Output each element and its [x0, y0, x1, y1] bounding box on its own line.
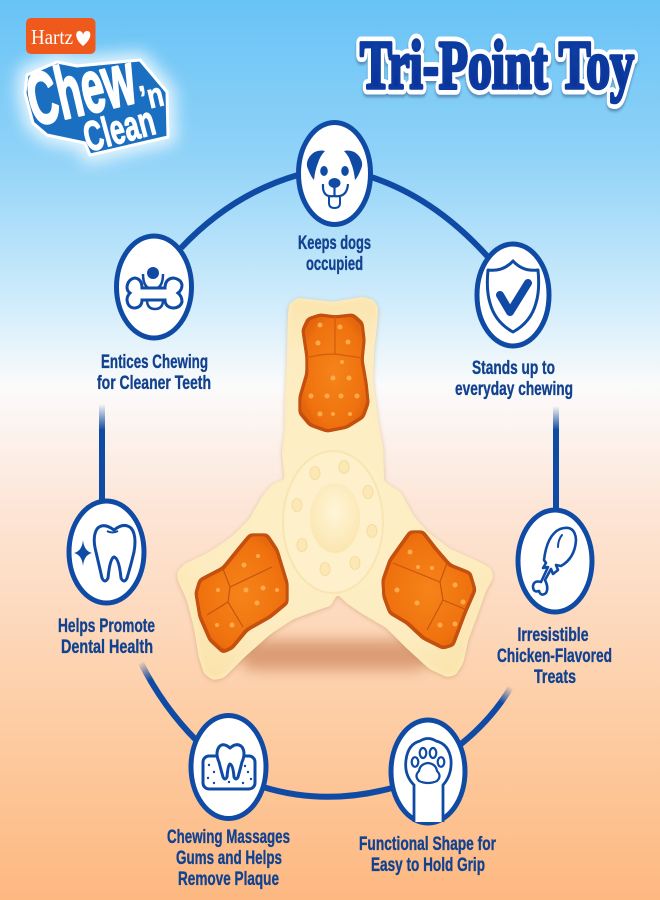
label: keeps dogs occupied: occupied [306, 254, 363, 275]
label: functional shape: Functional Shape for [359, 834, 496, 855]
logo glow [25, 60, 168, 155]
top orange insert [300, 315, 368, 431]
label: entices chewing: for Cleaner Teeth [97, 373, 211, 394]
disc studs [292, 460, 377, 576]
label: chewing massages gums: Gums and Helps [176, 848, 282, 869]
product: tri-point chew toy [178, 298, 492, 679]
icon: tooth with sparkle [69, 501, 144, 603]
central bump [310, 483, 360, 553]
central disc [283, 451, 383, 593]
icon: dog face [298, 122, 370, 224]
toy body [178, 298, 492, 679]
label: entices chewing: Entices Chewing [101, 352, 208, 373]
Chew'n wordmark [19, 36, 168, 161]
label: chewing massages gums: Chewing Massages [167, 827, 290, 848]
Hartz badge [26, 18, 96, 54]
Chew'n wordmark: ’n [136, 76, 167, 118]
toy shadow [240, 640, 430, 670]
label: entices chewing [97, 352, 211, 394]
Chew'n wordmark: Chew [19, 36, 143, 142]
icon: chicken drumstick [518, 510, 592, 612]
label: stands up to everyday chewing: Stands up to [472, 358, 555, 379]
right orange insert [383, 532, 475, 648]
label: helps promote dental health: Helps Promote [58, 616, 155, 637]
left orange insert [196, 535, 287, 652]
title: Tri-Point Toy [360, 28, 634, 104]
label: stands up to everyday chewing: everyday chewing [455, 379, 573, 400]
label: chicken-flavored treats [497, 625, 612, 688]
label: keeps dogs occupied: Keeps dogs [298, 233, 371, 254]
label: chewing massages gums: Remove Plaque [178, 869, 279, 890]
Chew'n wordmark: Clean [78, 97, 160, 161]
label: helps promote dental health: Dental Health [61, 637, 153, 658]
label: chicken-flavored treats: Irresistible [518, 625, 588, 646]
icon: tooth in gums [191, 716, 266, 818]
label: stands up to everyday chewing [455, 358, 573, 400]
label: chicken-flavored treats: Treats [534, 667, 576, 688]
label: helps promote dental health [58, 616, 155, 658]
icon: bone [116, 236, 192, 338]
icon: paw and leg [391, 720, 465, 823]
label: chicken-flavored treats: Chicken-Flavored [497, 646, 612, 667]
icon: shield with check [477, 244, 549, 346]
logo: Hartz Chew'n Clean [19, 18, 168, 161]
connecting ring arcs [102, 175, 556, 797]
label: functional shape: Easy to Hold Grip [371, 855, 485, 876]
label: functional shape [359, 834, 496, 876]
label: chewing massages gums [167, 827, 290, 890]
title: Tri-Point Toy [360, 28, 634, 104]
label: keeps dogs occupied [298, 233, 371, 275]
Hartz badge: Hartz [31, 25, 73, 49]
